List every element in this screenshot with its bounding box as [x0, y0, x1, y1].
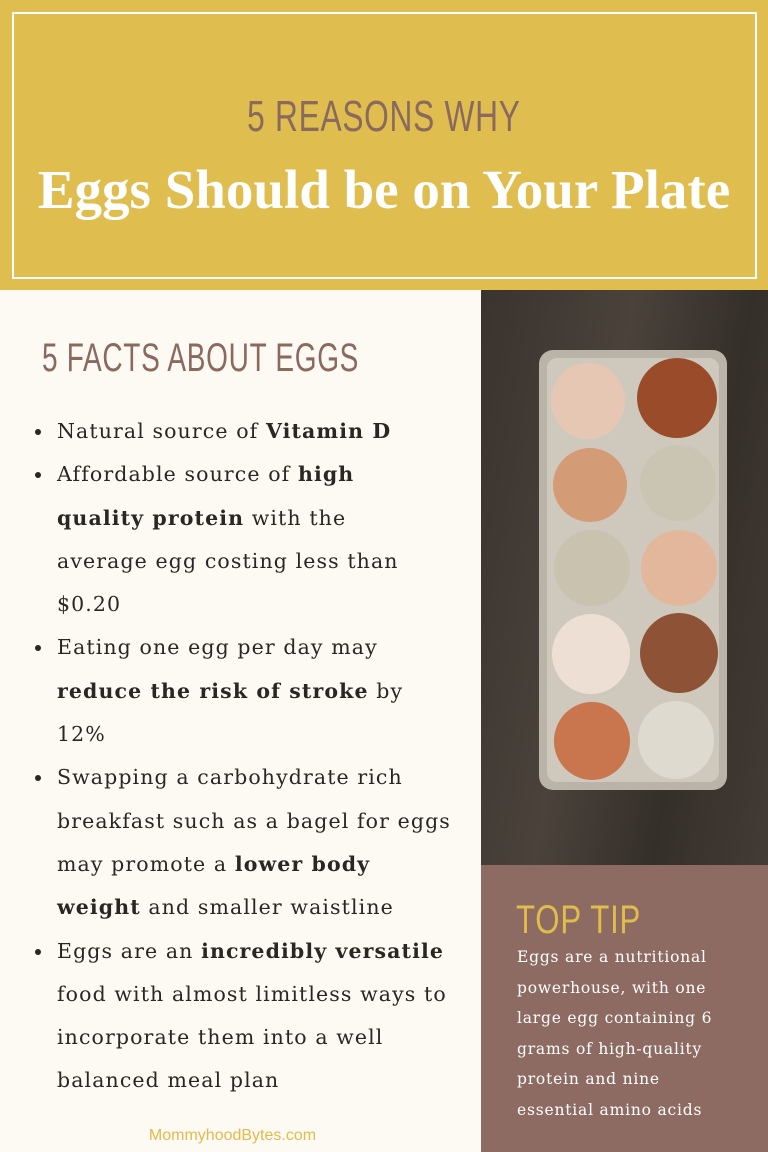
header banner — [0, 0, 768, 290]
facts list: average egg costing less than — [57, 549, 399, 573]
facts list: may promote a lower body — [57, 852, 370, 876]
header frame — [12, 12, 757, 279]
top tip text: protein and nine — [517, 1070, 660, 1088]
facts list: quality protein with the — [57, 506, 346, 530]
facts list: Eggs are an incredibly versatile — [57, 939, 444, 963]
facts list: $0.20 — [57, 592, 121, 616]
facts list: reduce the risk of stroke by — [57, 679, 403, 703]
title: Eggs Should be on Your Plate — [38, 159, 730, 220]
photo: egg carton — [481, 290, 768, 865]
top tip text: essential amino acids — [517, 1101, 702, 1119]
footer credit: MommyhoodBytes.com — [149, 1127, 316, 1144]
facts list: breakfast such as a bagel for eggs — [57, 809, 451, 833]
facts list: Natural source of Vitamin D — [57, 419, 391, 443]
top tip panel — [481, 865, 768, 1152]
carton — [539, 350, 727, 790]
top tip text: large egg containing 6 — [517, 1009, 712, 1027]
top tip text: Eggs are a nutritional — [517, 948, 707, 966]
facts list: balanced meal plan — [57, 1068, 279, 1092]
facts list: Eating one egg per day may — [57, 635, 378, 659]
facts list: weight and smaller waistline — [57, 895, 394, 919]
top tip text — [517, 948, 712, 1119]
facts list: incorporate them into a well — [57, 1025, 383, 1049]
top tip text: powerhouse, with one — [517, 979, 706, 997]
facts list — [35, 419, 451, 1092]
facts list: food with almost limitless ways to — [57, 982, 447, 1006]
facts list: Swapping a carbohydrate rich — [57, 765, 403, 789]
facts heading: 5 FACTS ABOUT EGGS — [42, 336, 359, 380]
top tip heading: TOP TIP — [516, 898, 641, 942]
facts list: 12% — [57, 722, 106, 746]
top tip text: grams of high-quality — [517, 1040, 702, 1058]
subtitle: 5 REASONS WHY — [247, 92, 521, 141]
facts list: Affordable source of high — [57, 462, 354, 486]
